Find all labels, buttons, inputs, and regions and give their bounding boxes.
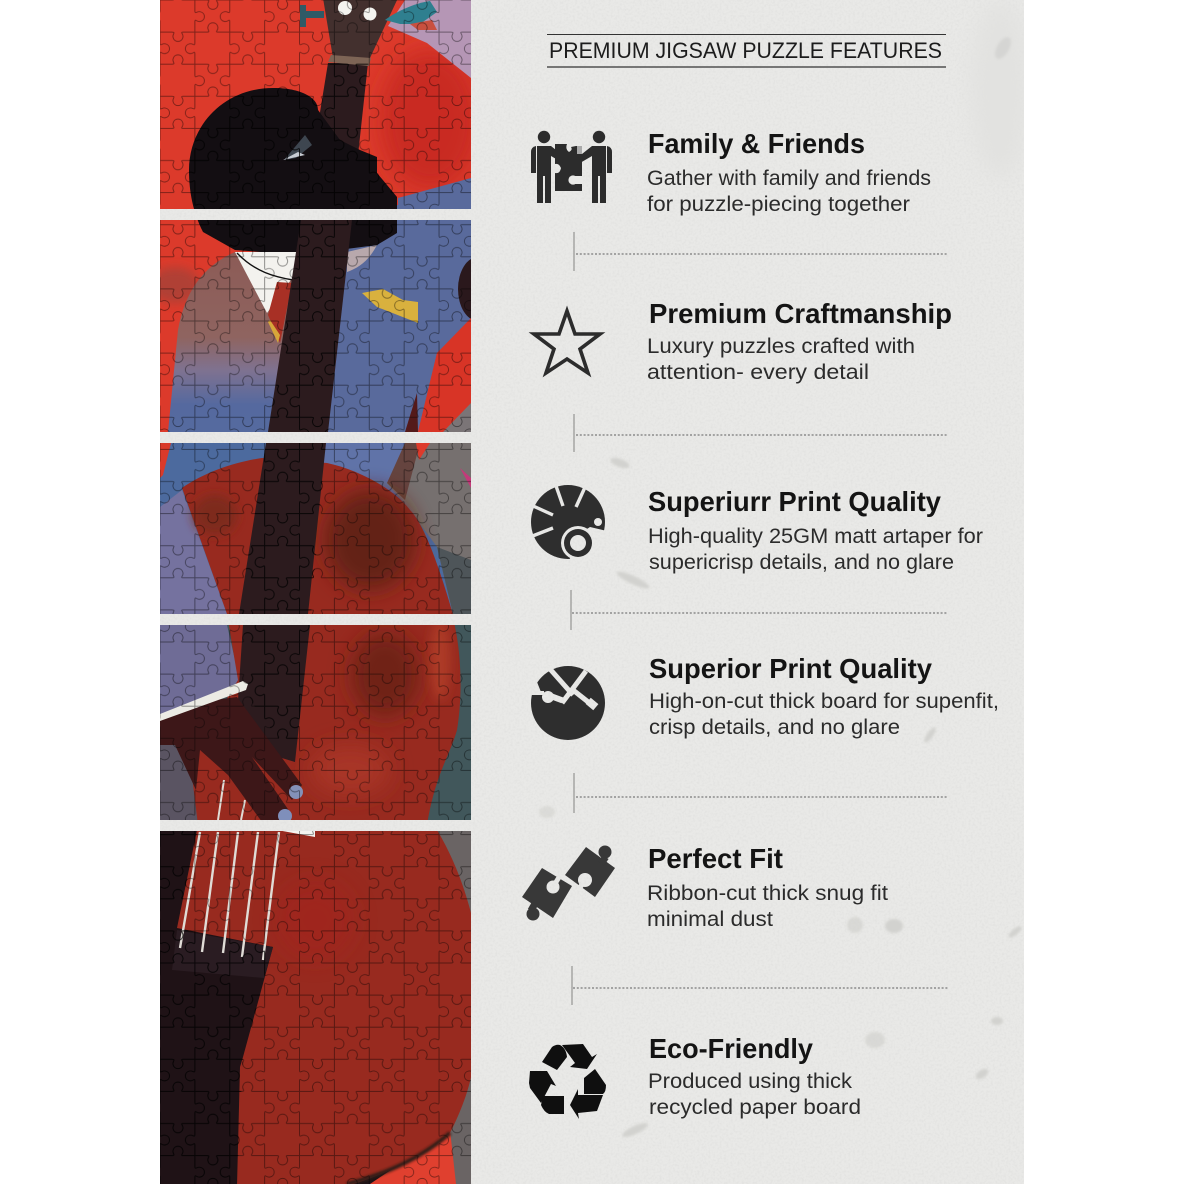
panel: puzzle artwork strips [160, 0, 471, 1184]
artwork: jigsaw cut lines on dark areas [160, 63, 394, 1184]
artwork: jigsaw cut lines [160, 0, 471, 1184]
feature: superior print quality [649, 653, 999, 739]
artwork: eye glint [284, 135, 312, 160]
feature: eco-friendly: Eco-Friendly [649, 1033, 813, 1064]
artwork: blue jacket [326, 178, 471, 432]
feature: family and friends: Family & Friends [648, 128, 865, 159]
artwork: gold pocket square [362, 289, 418, 323]
artwork: scroll and nut [300, 0, 398, 66]
artwork: collar [235, 245, 377, 343]
feature: superiurr print quality: supericrisp details, and no glare [649, 551, 954, 574]
feature: perfect fit: Perfect Fit [648, 843, 783, 874]
feature: superiurr print quality [648, 486, 983, 574]
feature: superiurr print quality: High-quality 25GM matt artaper for [648, 525, 983, 548]
icon: die-cut circle [531, 666, 605, 740]
feature: family and friends [647, 128, 931, 216]
artwork: dark shape at right [405, 259, 471, 432]
feature: eco-friendly: recycled paper board [649, 1096, 861, 1119]
artwork: red background [160, 0, 471, 440]
icon: family and friends [531, 131, 612, 203]
feature: superior print quality: crisp details, and no glare [649, 716, 900, 739]
artwork: tailpiece highlight [172, 930, 273, 978]
artwork: fingerboard and neck [238, 63, 368, 762]
icon: interlocking puzzle pieces [522, 846, 615, 920]
feature: perfect fit: Ribbon-cut thick snug fit [647, 882, 888, 905]
feature: eco-friendly [648, 1033, 861, 1119]
artwork: strings and tailpiece [180, 780, 315, 960]
feature: family and friends: for puzzle-piecing together [647, 193, 910, 216]
panel: paper background [160, 0, 1030, 1184]
feature: superiurr print quality: Superiurr Print Quality [648, 486, 941, 517]
feature: premium craftsmanship: Premium Craftmanship [649, 298, 952, 329]
artwork: neck overlay in strip two [268, 220, 352, 432]
artwork: bass shading [193, 490, 450, 1184]
title: PREMIUM JIGSAW PUZZLE FEATURES [549, 38, 942, 63]
feature: superior print quality: High-on-cut thick board for supenfit, [649, 690, 999, 713]
feature: family and friends: Gather with family and friends [647, 167, 931, 190]
icon: star [534, 311, 600, 373]
feature: premium craftsmanship [647, 298, 952, 384]
artwork: lower background tones [160, 440, 471, 1184]
feature: premium craftsmanship: Luxury puzzles crafted with [647, 335, 915, 358]
artwork: brown coat [168, 252, 300, 432]
artwork: bass body [177, 458, 471, 1184]
feature: superior print quality: Superior Print Quality [649, 653, 932, 684]
icon: recycling arrows [529, 1044, 606, 1119]
feature: perfect fit [647, 843, 888, 931]
artwork: hand and cuff [160, 681, 303, 823]
artwork: hat and face [189, 88, 397, 255]
artwork: feathered shape top right [385, 0, 471, 78]
icon: print quality dial [531, 485, 605, 559]
feature: perfect fit: minimal dust [647, 908, 773, 931]
feature: eco-friendly: Produced using thick [648, 1070, 853, 1093]
feature: premium craftsmanship: attention- every detail [647, 361, 869, 384]
